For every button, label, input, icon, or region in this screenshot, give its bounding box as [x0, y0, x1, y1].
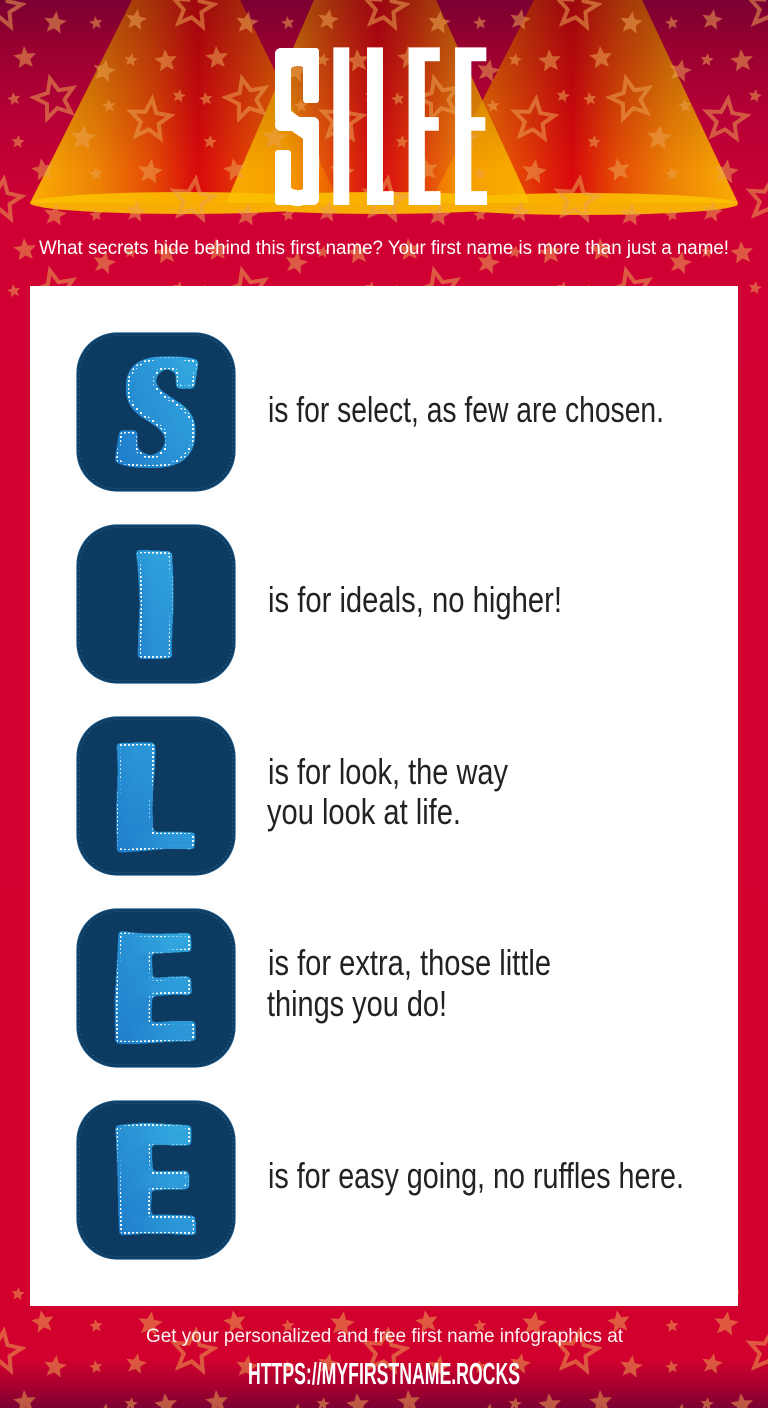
icon: letter S: [77, 321, 235, 499]
title: S: [272, 5, 323, 251]
icon: letter E second: [77, 1093, 235, 1268]
spotlight: left cone: [30, 0, 340, 203]
panel: letters: [30, 286, 738, 1306]
text: L lines: you look at life.: [267, 791, 461, 832]
row: L: [77, 710, 508, 883]
icon: letter E: E: [120, 901, 189, 1076]
spotlight pools: [30, 192, 738, 215]
text: L lines: [267, 751, 508, 832]
text: L lines: is for look, the way: [268, 751, 508, 792]
row: E second: [77, 1093, 684, 1268]
row: I: [77, 515, 562, 691]
footer url: HTTPS://MYFIRSTNAME.ROCKS: [248, 1356, 520, 1391]
text: E lines: [267, 942, 551, 1024]
icon: letter S: S: [118, 321, 198, 499]
icon: letter I: I: [140, 515, 173, 691]
row: S: [77, 321, 664, 499]
title: [272, 0, 482, 257]
spotlights: [30, 0, 738, 215]
icon: letter E second: E: [120, 1093, 189, 1268]
spotlight: right cone: [430, 0, 738, 203]
icon: letter I: [77, 515, 235, 691]
subtitle: What secrets hide behind this first name? Your first name is more than just a name!: [39, 238, 729, 259]
star pattern: footer: [0, 1285, 768, 1408]
text: E lines: things you do!: [267, 983, 447, 1024]
icon: letter L: [77, 710, 235, 883]
text: I line: is for ideals, no higher!: [268, 579, 562, 620]
title: E: [412, 0, 436, 257]
icon: letter L: L: [120, 710, 187, 883]
title: L: [371, 0, 388, 257]
footer text: Get your personalized and free first name infographics at: [146, 1326, 624, 1347]
icon: letter E: [77, 901, 235, 1076]
star pattern: header: [0, 0, 768, 300]
title: I: [337, 0, 346, 257]
text: S line: is for select, as few are chosen.: [268, 389, 664, 430]
spotlight: centre cone: [226, 0, 530, 203]
title: E: [459, 0, 482, 257]
row: E: [77, 901, 551, 1076]
text: E lines: is for extra, those little: [268, 942, 551, 983]
